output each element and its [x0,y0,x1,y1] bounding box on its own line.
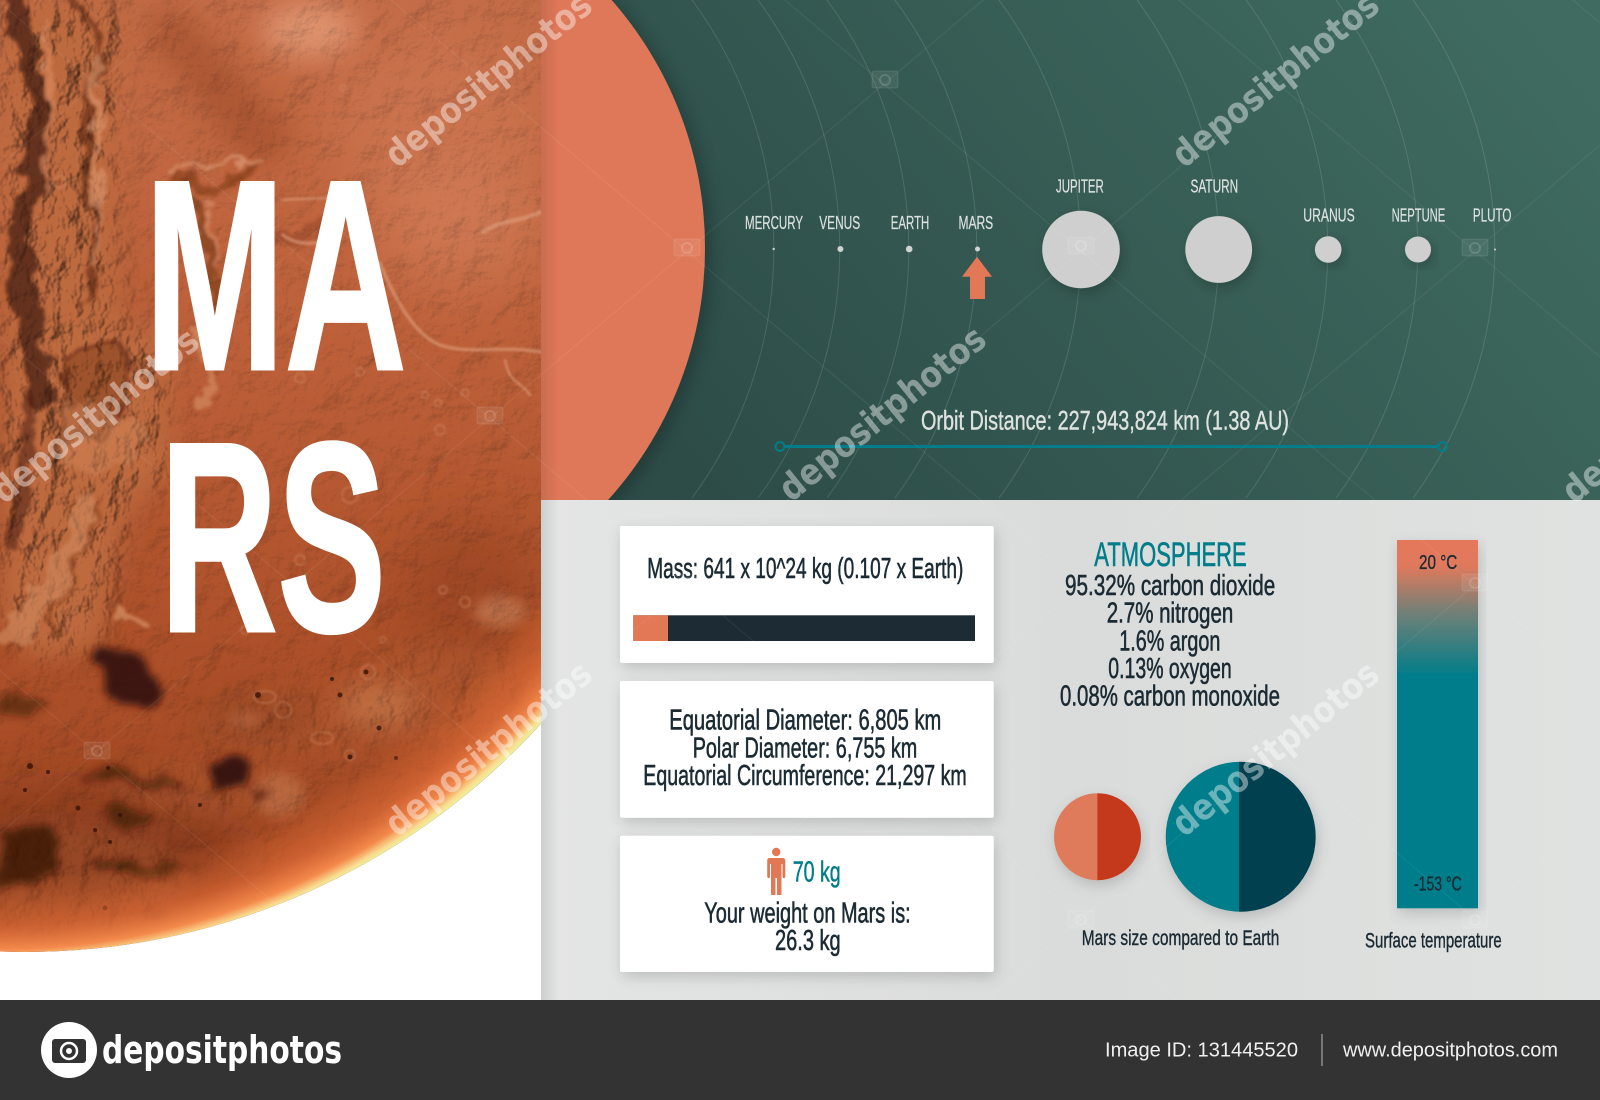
left panel shadow [541,0,559,1000]
planet: Jupiter: JUPITER [1056,177,1104,197]
planet: Pluto: PLUTO [1473,206,1511,226]
watermark text [0,0,1600,845]
orange planet disc [541,0,713,500]
planet: Earth: EARTH [891,213,929,233]
temperature bar: 20 °C [1419,552,1457,574]
footer bar [0,1000,1600,1100]
card: weight [620,836,994,972]
watermark camera marks [84,71,1488,928]
Mars canyon relief [0,0,479,917]
card: diameters [620,681,994,818]
planet: Mercury: MERCURY [745,213,803,233]
card: mass [620,526,994,663]
planet: Neptune: NEPTUNE [1392,206,1445,226]
watermark text: depositphotos [377,653,600,845]
planet: Venus: VENUS [819,213,860,233]
arrow: Mars marker [962,257,992,299]
mass bar [633,615,975,641]
panel: data background [541,500,1600,1000]
planet row [745,177,1511,299]
panel: Mars photo [0,0,541,952]
footer divider [1322,1034,1323,1066]
Mars size circle [1054,793,1141,881]
planet: Jupiter [1042,177,1120,288]
orbit lines [692,0,1495,498]
Mars dark spots [0,640,272,922]
Mars crater pits [23,670,398,910]
planet: Neptune [1392,206,1445,262]
planet: Mars: MARS [958,213,993,233]
card: weight: 26.3 kg [775,925,841,957]
planet: Mercury [745,213,803,250]
atmosphere block: 1.6% argon [1119,625,1220,657]
Earth size circle [1165,761,1316,912]
planet: Uranus: URANUS [1303,206,1355,226]
heading: ATMOSPHERE [1094,536,1247,574]
atmosphere block: 0.13% oxygen [1108,653,1232,685]
Mars craters [54,85,470,760]
planet: Pluto [1473,206,1511,250]
watermark text: depositphotos [771,318,994,510]
card: diameters: Equatorial Diameter: 6,805 km [669,704,941,736]
orbit distance bar [776,442,1447,451]
temperature bar: -153 °C [1414,874,1462,896]
watermark text: depositphotos [1164,653,1387,845]
orbit distance label: Orbit Distance: 227,943,824 km (1.38 AU) [921,405,1289,435]
temperature bar [1397,540,1478,908]
website: www.depositphotos.com [1342,1040,1558,1062]
card: weight: Your weight on Mars is: [704,898,911,930]
panel: solar system background [541,0,1600,500]
temperature caption: Surface temperature [1365,929,1502,952]
title: MA [144,125,406,427]
Mars canyon shadows [12,0,345,635]
planet: Saturn: SATURN [1190,177,1238,197]
atmosphere block: 95.32% carbon dioxide [1065,570,1275,602]
card: diameters: Polar Diameter: 6,755 km [693,732,917,764]
card: weight: 70 kg [793,857,841,889]
planet: Uranus [1303,206,1355,263]
size comparison caption: Mars size compared to Earth [1082,927,1279,950]
planet: Saturn [1185,177,1252,283]
atmosphere block: 2.7% nitrogen [1107,598,1233,630]
atmosphere block [1060,536,1280,712]
title [154,181,404,636]
Mars ridges [282,195,541,395]
atmosphere block: 0.08% carbon monoxide [1060,680,1280,712]
footer logo: depositphotos [102,1028,342,1072]
card: diameters: Equatorial Circumference: 21,297 km [643,760,967,792]
image id: Image ID: 131445520 [1105,1040,1298,1062]
planet: Earth [891,213,929,252]
Mars surface texture [0,0,550,1000]
planet: Venus [819,213,860,252]
icon: person [767,848,785,895]
planet: Mars [958,213,993,252]
card: mass: Mass: 641 x 10^24 kg (0.107 x Earth) [647,553,963,585]
atmosphere glow [0,602,541,952]
title: RS [160,387,386,689]
footer logo [41,1022,342,1078]
